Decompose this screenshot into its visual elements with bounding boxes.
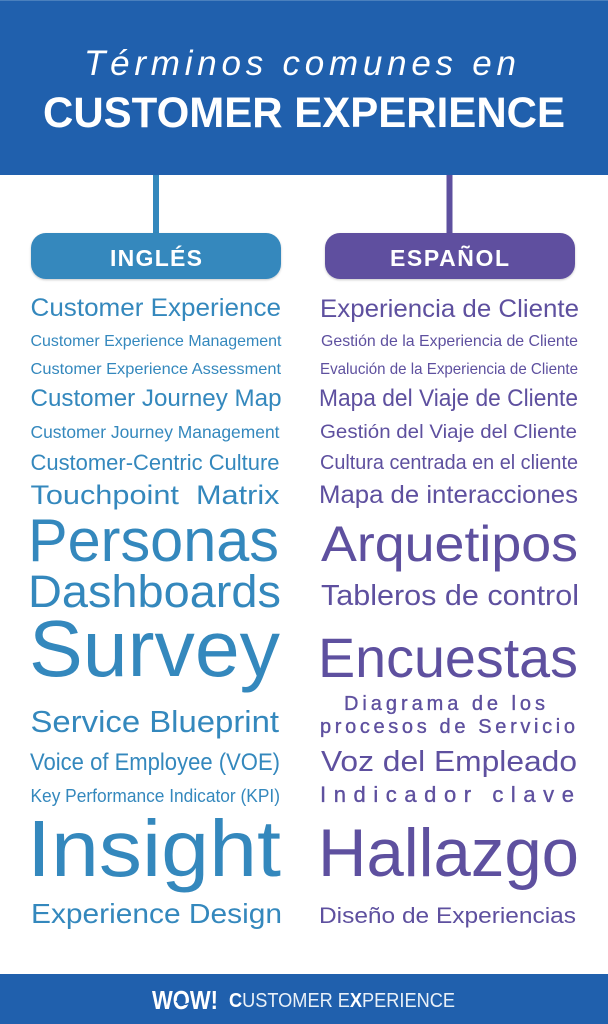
term: Indicador clave bbox=[320, 782, 574, 807]
term: Voice of Employee (VOE) bbox=[30, 749, 280, 776]
term: Encuestas bbox=[318, 626, 578, 689]
term: Diagrama de los bbox=[344, 693, 545, 715]
term: Arquetipos bbox=[321, 516, 578, 572]
term: Personas bbox=[28, 507, 279, 574]
title line 1: Términos comunes en bbox=[84, 44, 516, 83]
column: spanish terms bbox=[318, 295, 579, 928]
term: Diseño de Experiencias bbox=[319, 903, 576, 928]
logo: WOW!: WOW! bbox=[152, 985, 218, 1015]
term: Dashboards bbox=[28, 566, 281, 617]
term: Touchpoint Matrix bbox=[30, 480, 280, 510]
term: procesos de Servicio bbox=[320, 716, 575, 738]
term: Key Performance Indicator (KPI) bbox=[30, 786, 280, 806]
term: Experiencia de Cliente bbox=[320, 295, 579, 323]
term: Service Blueprint bbox=[30, 704, 279, 739]
term: Cultura centrada en el cliente bbox=[320, 452, 578, 474]
connector: inglés bbox=[153, 175, 159, 235]
term: Tableros de control bbox=[321, 580, 579, 612]
term: Customer-Centric Culture bbox=[30, 450, 280, 475]
term: Mapa del Viaje de Cliente bbox=[319, 385, 578, 412]
term: Evalución de la Experiencia de Cliente bbox=[320, 361, 578, 378]
term: Gestión del Viaje del Cliente bbox=[320, 421, 577, 443]
term: Customer Journey Management bbox=[30, 422, 280, 442]
term: Customer Experience Assessment bbox=[30, 361, 282, 378]
term: Mapa de interacciones bbox=[319, 481, 578, 509]
column: english terms bbox=[27, 294, 282, 929]
title line 2: CUSTOMER EXPERIENCE bbox=[43, 89, 565, 137]
footer bar bbox=[0, 974, 608, 1024]
term: Experience Design bbox=[31, 898, 282, 929]
term: Customer Journey Map bbox=[30, 385, 282, 412]
term: Hallazgo bbox=[318, 815, 579, 891]
term: Voz del Empleado bbox=[321, 746, 577, 778]
pill: inglés: INGLÉS bbox=[110, 244, 202, 271]
header banner bbox=[0, 0, 608, 175]
connector: español bbox=[446, 175, 452, 235]
pill: español bbox=[325, 233, 575, 279]
term: Customer Experience bbox=[30, 294, 281, 322]
footer brand text: CUSTOMER EXPERIENCE bbox=[229, 990, 455, 1012]
term: Customer Experience Management bbox=[30, 333, 282, 350]
term: Insight bbox=[27, 804, 281, 893]
pill: español: ESPAÑOL bbox=[390, 244, 509, 271]
pill: inglés bbox=[31, 233, 281, 279]
term: Gestión de la Experiencia de Cliente bbox=[321, 333, 578, 350]
term: Survey bbox=[29, 604, 280, 693]
